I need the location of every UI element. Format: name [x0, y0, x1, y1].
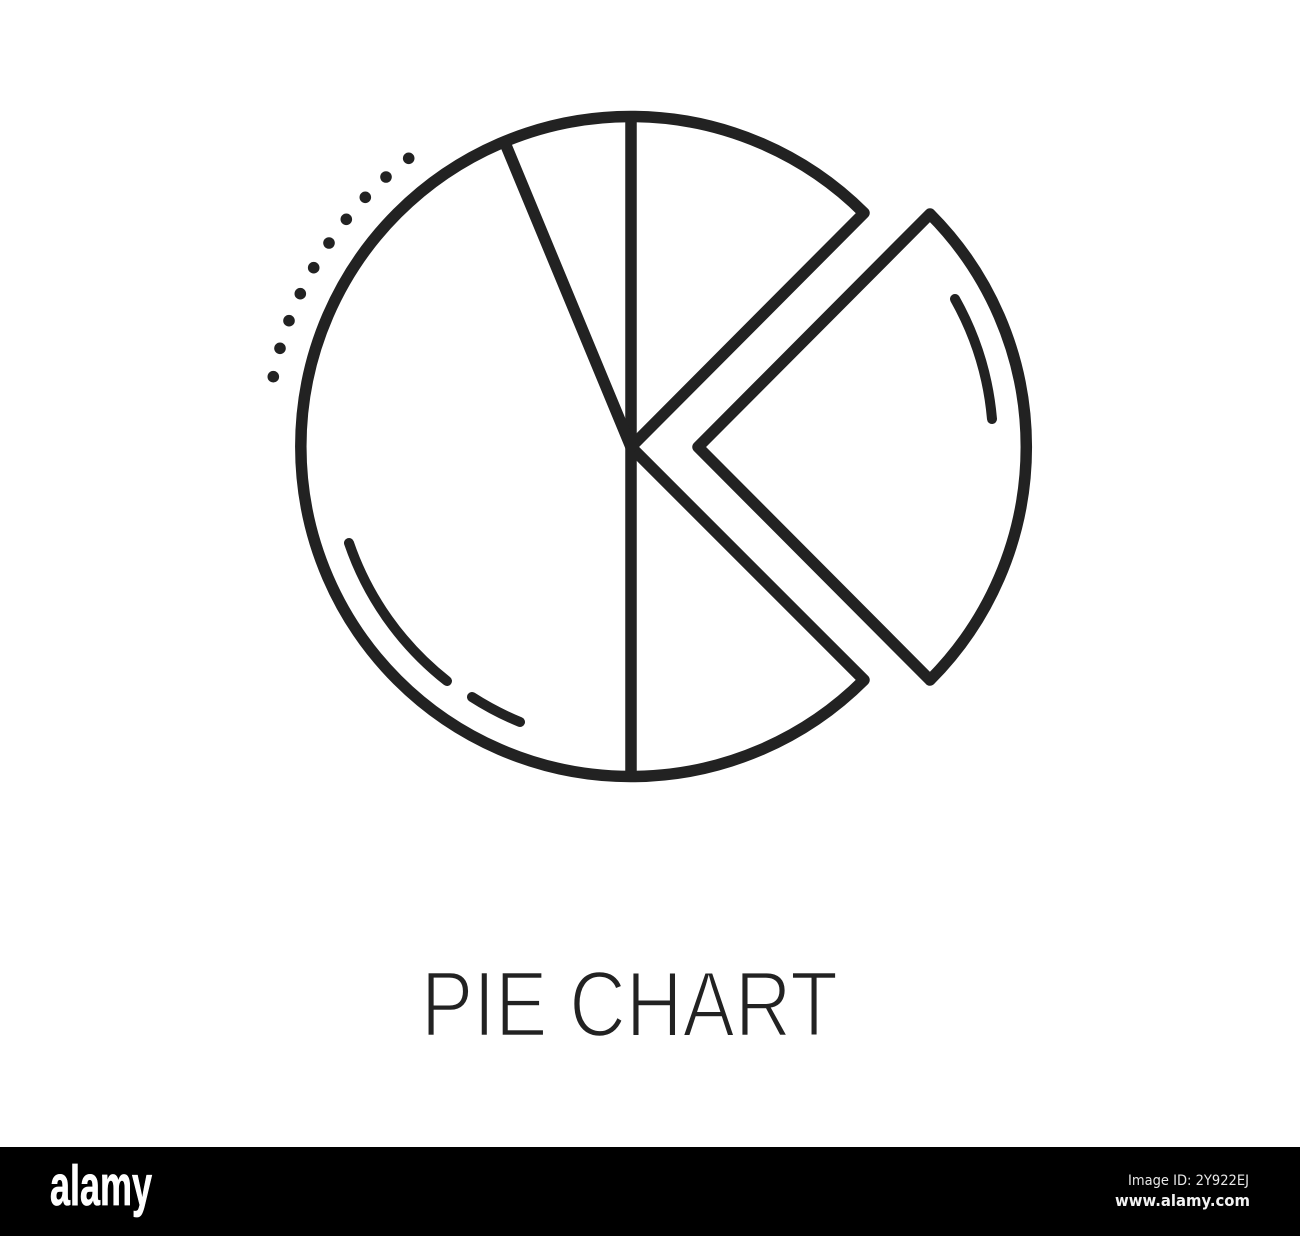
- vertical slice divider: [625, 117, 637, 777]
- title: PIE CHART: [421, 952, 838, 1056]
- dotted arc: [268, 152, 415, 383]
- icon: pie chart: [301, 116, 1026, 777]
- image id: Image ID: 2Y922EJ: [1128, 1173, 1249, 1189]
- highlight arc: lower left long: [349, 543, 447, 681]
- footer logo: alamy: [50, 1154, 152, 1218]
- website address: www.alamy.com: [1115, 1191, 1250, 1210]
- diagonal slice divider: [505, 143, 631, 447]
- highlight arc: lower left short: [472, 697, 520, 722]
- highlight arc: detached slice: [955, 299, 992, 419]
- detached pie slice: [698, 214, 1026, 680]
- main pie body: [301, 116, 864, 776]
- footer bar: [0, 1147, 1300, 1236]
